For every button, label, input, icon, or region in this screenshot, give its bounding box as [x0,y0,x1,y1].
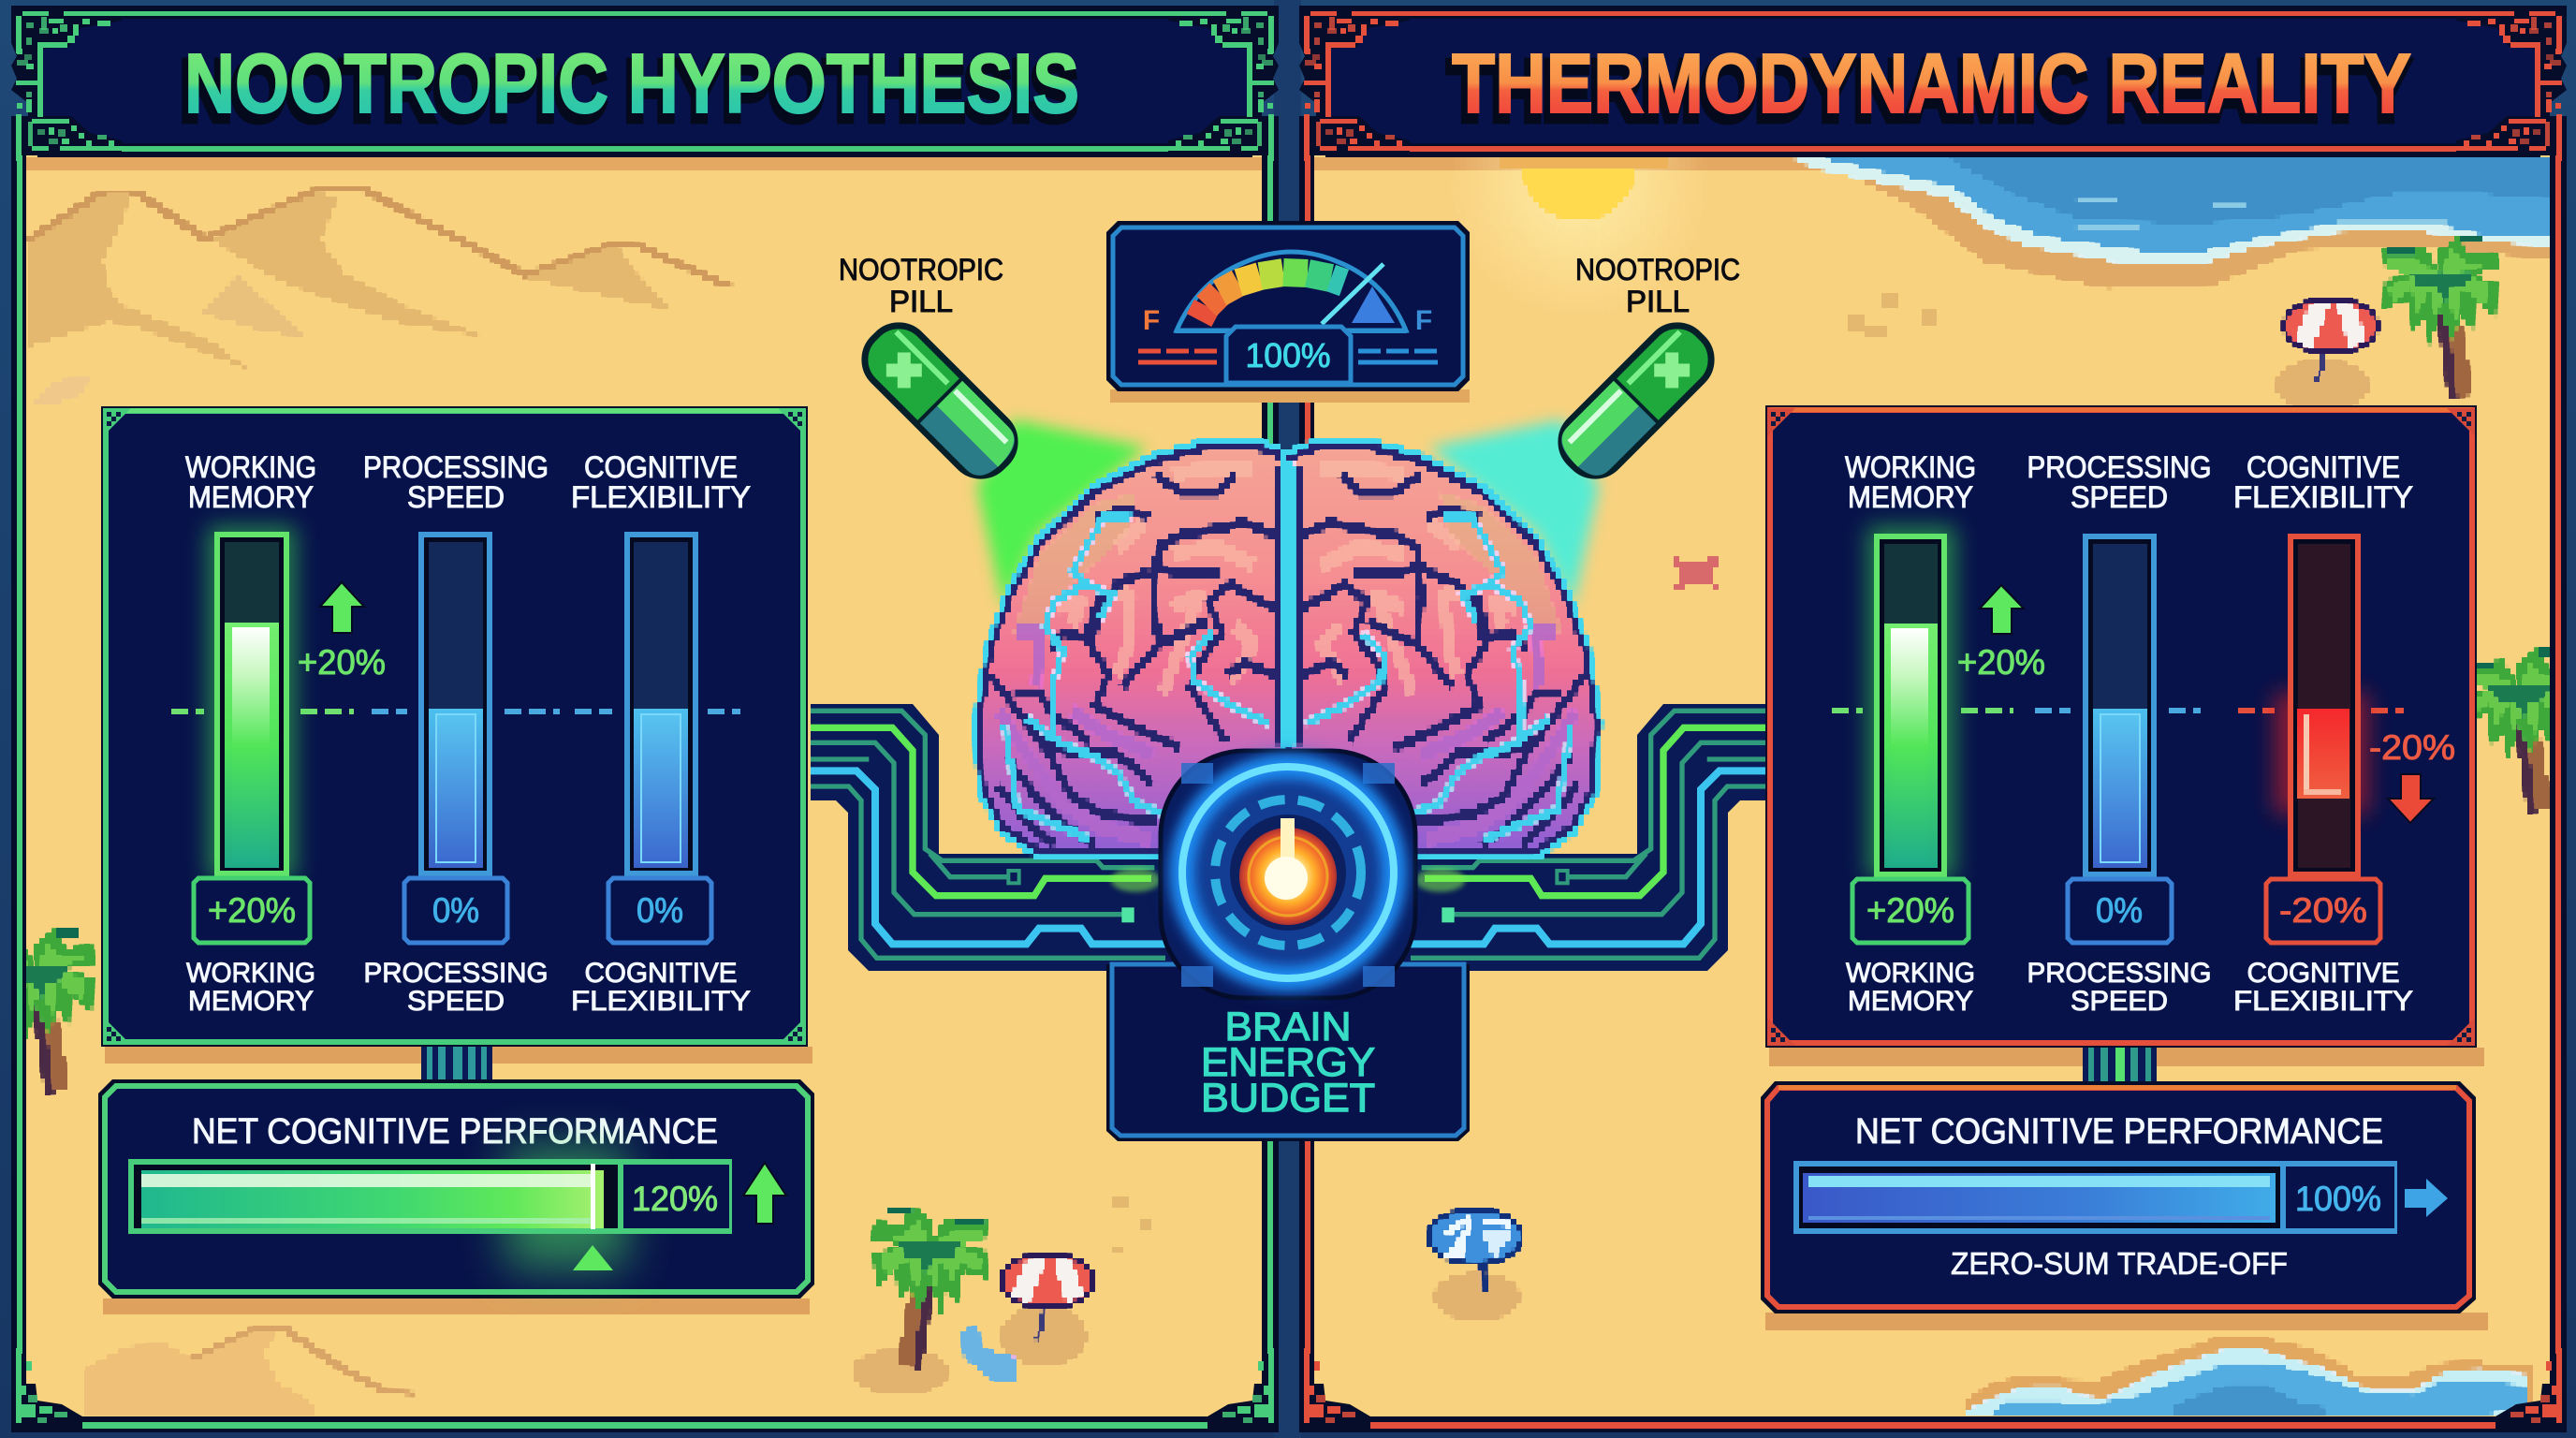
metric labels bottom: PROCESSING [363,958,549,989]
panel: left net cognitive performance [98,1079,814,1314]
label: nootropic pill left [839,253,1003,318]
icon: pill left [853,314,1027,488]
text: brain energy budget [1201,1005,1375,1121]
metric labels bottom: COGNITIVE [2247,958,2400,989]
panel: central pillar [1274,0,1301,1438]
net bar 120%: 120% [632,1180,718,1218]
metric labels bottom: FLEXIBILITY [2233,986,2413,1017]
beach chair [961,1322,1016,1384]
baseline dashes [1832,708,2404,713]
title: thermodynamic reality: THERMODYNAMIC REALITY [1452,37,2411,131]
delta label +20%: +20% [1957,643,2045,682]
metric labels top: COGNITIVE [2247,450,2400,484]
net bar 120% [131,1147,729,1269]
bar: cognitive flexibility -20% [2275,536,2368,874]
up arrow net [743,1163,786,1224]
gauge arc [1175,252,1407,333]
down arrow -20% [2388,774,2434,823]
metric labels bottom: FLEXIBILITY [571,986,751,1017]
value box: 0% cognitive flexibility: 0% [637,891,683,930]
value box: 0% cognitive flexibility [608,878,711,943]
value box: 0% processing speed: 0% [432,891,479,930]
text: brain energy budget: BRAIN [1224,1005,1352,1049]
value box: 0% [2068,879,2172,943]
delta label -20%: -20% [2369,728,2455,767]
frame: right red border and header [1299,6,2567,1432]
value box: -20%: -20% [2279,891,2367,930]
palm tree right edge [2477,647,2550,814]
striped umbrella top right [2276,297,2379,412]
sun glow [1466,157,1690,292]
metric labels top: MEMORY [1848,480,1973,514]
net bar 100% [1796,1164,2394,1231]
label: nootropic pill right: NOOTROPIC [1575,253,1740,286]
delta label +20%: +20% [298,643,386,682]
waves bottom right [1966,1337,2532,1416]
bar: cognitive flexibility 0% [627,535,695,873]
metric labels top: FLEXIBILITY [571,480,751,514]
baseline dashes [171,709,740,714]
blue umbrella [1427,1208,1524,1321]
up arrow +20% [320,582,364,633]
metric labels top: PROCESSING [2027,450,2211,484]
gauge ticks [1138,351,1438,362]
metric labels bottom: SPEED [2071,986,2168,1017]
panel: energy gauge [1106,221,1470,403]
panel: left metrics [101,406,812,1064]
footprints right [1846,295,1935,337]
metric labels bottom [186,958,751,1017]
desert scenery left [0,190,1181,1416]
gauge label F right: F [1415,305,1432,336]
marker triangle [573,1245,613,1270]
metric labels top: SPEED [2071,480,2168,514]
icon: pill right [1549,314,1723,488]
metric labels top: MEMORY [188,480,314,514]
label: nootropic pill left: PILL [889,285,953,318]
right arrow net [2405,1179,2448,1217]
title: nootropic hypothesis: NOOTROPIC HYPOTHESIS [184,37,1079,131]
label: nootropic pill left: NOOTROPIC [839,253,1003,286]
energy hub core [1161,751,1415,998]
sun [1522,169,1634,219]
bar: working memory +20% [208,526,296,878]
metric labels top: PROCESSING [363,450,549,484]
label: nootropic pill right: PILL [1626,285,1690,318]
value box: 0% processing speed [404,878,507,943]
sand dunes top left [29,190,731,405]
metric labels bottom: MEMORY [1848,986,1973,1017]
red beach umbrella [999,1252,1096,1366]
metric labels top: WORKING [185,450,316,484]
teal glow beam right [1429,419,1599,609]
net title: NET COGNITIVE PERFORMANCE [192,1112,718,1152]
metric labels top [1845,450,2413,514]
gauge label F left: F [1143,305,1160,336]
beach scenery right [1427,56,2576,1416]
value box: +20%: +20% [208,891,296,930]
metric labels bottom: SPEED [407,986,505,1017]
frame: left green border and header [11,6,1279,1432]
connector right [2083,1048,2157,1081]
palm tree left edge [26,928,95,1095]
crab [1672,558,1720,590]
label: nootropic pill right [1575,253,1740,318]
metric labels top: COGNITIVE [584,450,738,484]
metric labels bottom [1846,958,2413,1017]
panel: right net cognitive performance [1761,1081,2488,1330]
palm tree beach [852,1206,988,1394]
metric labels top [185,450,751,514]
green glow beam left [977,419,1147,609]
text: brain energy budget: ENERGY [1201,1040,1375,1085]
metric labels bottom: PROCESSING [2027,958,2211,989]
metric labels bottom: COGNITIVE [584,958,738,989]
connector left [421,1047,492,1080]
value box: +20% [194,878,310,943]
net title: NET COGNITIVE PERFORMANCE [1855,1112,2383,1152]
metric labels top: WORKING [1845,450,1976,484]
metric labels bottom: WORKING [186,958,315,989]
panel: brain energy budget [1106,964,1470,1141]
circuit connector right [1397,704,1765,971]
metric labels bottom: MEMORY [188,986,314,1017]
zero-sum caption: ZERO-SUM TRADE-OFF [1951,1246,2288,1281]
title: thermodynamic reality: THERMODYNAMIC REALITY [1448,45,2409,139]
bar: processing speed 0% [421,535,490,873]
bar: processing speed 0% [2086,536,2154,874]
circuit connector left [811,704,1179,971]
brain illustration [979,447,1596,852]
ocean top right [1791,157,2553,288]
metric labels top: SPEED [407,480,505,514]
metric labels top: FLEXIBILITY [2233,480,2413,514]
panel: right metrics [1765,405,2484,1066]
value box: 0%: 0% [2096,891,2143,930]
bar: working memory +20% [1867,526,1955,878]
value box: +20% [1852,879,1969,943]
value box: -20% [2266,879,2380,943]
title: nootropic hypothesis: NOOTROPIC HYPOTHESIS [181,45,1077,139]
net bar 100%: 100% [2295,1180,2381,1218]
gauge value 100%: 100% [1245,336,1331,374]
text: brain energy budget: BUDGET [1201,1076,1375,1121]
value box: +20%: +20% [1866,891,1954,930]
footprints [1112,1196,1151,1253]
up arrow +20% [1980,585,2024,634]
sand dunes bottom left [84,1328,414,1416]
gauge value 100% [1226,327,1351,383]
palm tree top right [2383,235,2499,400]
metric labels bottom: WORKING [1846,958,1975,989]
